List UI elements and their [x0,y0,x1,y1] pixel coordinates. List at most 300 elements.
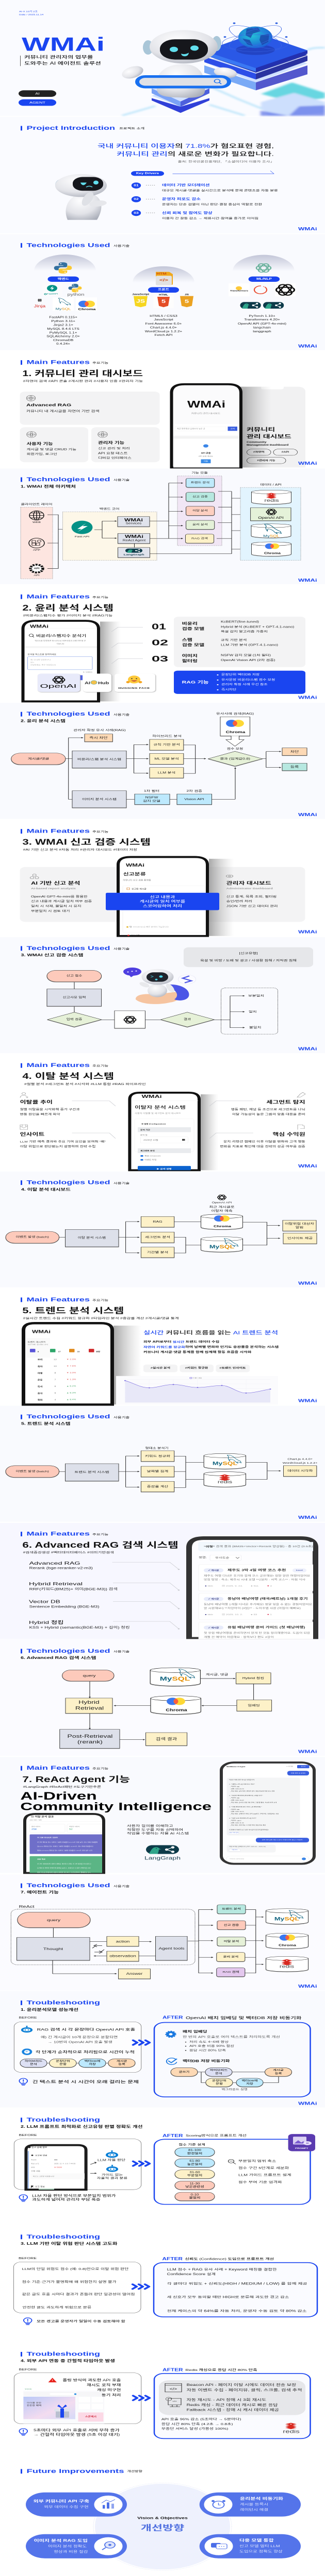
node: register [282,763,307,771]
connector: tools to modules [188,1910,213,1973]
tagline: 도와주는 AI 에이전트 솔루션 [24,61,101,66]
numbers: 03 [152,655,168,664]
node: MySQL: MySQL [213,1461,237,1466]
slide: hero cover [0,0,325,116]
problem note: 5초마다 외부 API 호출로 서버 부하 증가 [34,2428,120,2432]
panel: report types: 욕설 및 비방 / 도배 및 광고 / 사생활 침해 / 저작권 침해 [200,959,297,962]
panel: RAG function: 즉시차단 [221,688,236,691]
phone: analyzer: 석합니다 [56,642,65,645]
heading: Technologies Used [26,242,110,248]
phone: report screen [118,857,207,936]
panel: after: Redis 캐싱 - 최근 데이터 캐시로 빠른 응답 [187,2403,278,2406]
layer: feature modules: 신고 검증 [192,495,208,498]
panel: after: 글쓰기 [179,2070,190,2073]
heading: 사용기술 [113,1650,130,1653]
column: backend: MySQL [56,307,71,311]
phone: agent chat: 이탈 분석을 실행합니다 (기간: 2025-06 ~ 2025-10) [229,1846,266,1848]
phone: agent chat: ✦ 새 대화 [286,1766,294,1767]
column: frontend: </> [159,278,168,282]
node: image filters: Vision API [184,798,204,801]
panel: model details: LLM 기반 분석 (GPT-4.1-nano) [221,643,278,647]
back card: dashboard summary [240,387,305,467]
group: ReAct loop: query [47,1918,61,1922]
phone: churn result: 뷰(view) 행동을 하는 사용자 그룹의 이탈률이 14.6%로, 이는 전체 이탈률보다 [37,1845,93,1847]
node: trend system [59,1464,119,1481]
panel: report card: AI 기반 신고 분석 [31,880,80,886]
card: admin functions [91,427,160,462]
phone: agent chat: - 작성자: bbb [230,1808,240,1810]
panel: model details: 스팸 [182,637,192,642]
card: Advanced RAG: 커뮤니티 내 게시글을 자연어 기반 검색 [26,410,100,413]
pill: AGENT: AGENT [29,101,45,104]
panel: before: 문장단위 [56,2059,70,2062]
panel: RAG function: 유사문장 비윤리/스팸 점수 보정 [221,678,275,682]
panel: after [154,2263,317,2317]
subtitle: 3. LLM 기반 이탈 위험 판단 시스템 고도화 [21,2241,118,2246]
heading [21,594,109,600]
layer: feature modules: 기능 모듈 [191,471,208,474]
group: hybrid analyzers: 규칙 기반 분석 [153,743,180,747]
phone: agent chat [221,1762,314,1864]
node: instant block: 즉시 차단 [89,736,108,739]
driver 03: 03 [134,211,139,214]
phone: dashboard: API 콘솔 [201,452,211,454]
phone: dashboard: 검색 [231,428,235,430]
after label: Scoring방식으로 프롬프트 개선 [186,2133,247,2138]
slide: project introduction [0,117,325,233]
column: backend: 백엔드 [58,277,69,280]
phone: trend dashboard: 6 [55,1385,56,1387]
phone: search results: ● bbb [205,1614,213,1616]
connector: to analyzers [119,1222,139,1253]
heading: 사용기술 [113,244,130,248]
node: result diamond [208,751,262,766]
pill: async ethics analysis: 레이턴시 해결 [240,2508,268,2512]
column: frontend: WordCloud.js 1.2.2+ [145,330,182,333]
node: input validation: 입력 검증 [67,1018,82,1021]
callout: Vector DB: Sentence Embedding (BGE-M3) [29,1605,100,1608]
callout: key revenue [209,1125,305,1148]
panel: before: RAG 검색 시 각 문장마다 OpenAI API 호출 [37,2028,136,2031]
card: user functions: 회원가입, 로그인 [26,452,57,455]
node: block: 차단 [290,750,299,753]
headline: 실시간 커뮤니티 흐름을 읽는 AI 트렌드 분석 [143,1330,278,1335]
before label: BEFORE [19,2016,37,2020]
layer: feature modules [177,471,222,546]
heading: Main Features [26,1297,90,1303]
group: outcome branches: 부분일치 [248,994,264,997]
panel: before: 신고된 댓글 [35,2154,47,2156]
illustration: stacked blue platform [204,33,307,90]
numbers: 02 [152,638,168,647]
layer: data and API: 데이터 / API [260,483,282,486]
phone: search results: 정렬: [199,1555,207,1559]
column: ML/NLP: PyTorch 1.10+ [249,315,275,317]
driver 02: 운영자는 단순 검열이 아닌 판단·결정 중심의 역할로 전환 [162,202,263,206]
panel: report types: [신고유형] [239,952,258,955]
panel: before: 예) 긴 게시글이 10개 문장으로 분할되면 [41,2035,118,2039]
arrow: post data to chunking [201,1673,235,1679]
panel: before: 게시글 [117,2059,127,2062]
panel: after: 전체 케이스의 약 64%를 자동 처리, 운영자 수동 검토 약 80% 감소 [167,2309,307,2313]
node: post retrieval: Post-Retrieval [68,1734,112,1739]
layer: client: API [34,567,40,570]
panel: RAG function: 문장단위 벡터DB 저장 [221,673,259,676]
panel: before: ! [52,2380,53,2382]
phone: agent chat: - 주요 내용: 날씨 확인, 렌터카 필수, 맛집 정보와 여행 코스 포함 [230,1790,275,1792]
phone shadow [209,859,234,936]
heading: 주요기능 [92,1298,109,1302]
column: backend: FastAPI [47,293,58,295]
phone: analyzer: 안녕하세요, 좋은 아침입니다 [30,664,57,666]
node: segment analysis: 세그먼트 분석 [145,1235,170,1239]
phone: agent chat: 4. **일본 도쿄 자유여행 3박 4일 후기** [229,1818,257,1819]
layer: feature modules: 이탈 분석 [192,509,208,512]
panel: before: 각 단계가 순차적으로 처리됨으로 시간이 누적 [36,2050,135,2054]
node: MySQL: MySQL [209,1244,234,1249]
phone: search results: ♥ 1 [267,1614,272,1616]
driver 03 [132,210,258,220]
feature title: 5. 트렌드 분석 시스템 [22,1306,124,1315]
phone: trend dashboard: 8 [55,1372,56,1374]
node: segment analysis [141,1232,174,1243]
node: chroma with OpenAI note [201,1194,243,1230]
callout: Advanced RAG: Advanced RAG [29,1561,80,1566]
pill: multi model integration: 신고 모델 멀티 LLM [239,2544,280,2548]
panel: after: Confidence Score 설계 [167,2272,216,2276]
heading: 주요기능 [92,1533,109,1536]
illustration: robot with search bar [118,30,239,98]
pill: image analysis RAG [26,2534,127,2558]
panel: after [154,2374,311,2438]
subtitle: 6. Advanced RAG 검색 시스템 [21,1655,96,1660]
node: trend system: 트렌드 분석 시스템 [74,1470,109,1474]
panel: after: 부분일치 범위 축소 [238,2159,276,2163]
arrow: embedding to chroma [202,1705,237,1706]
center circle: 개선방향 [141,2524,185,2532]
phone: search results: ● 511 [251,1585,258,1587]
illustration: thinking robot [55,174,107,220]
phone: agent chat: 여행 관련 글 보여줘 [291,1772,305,1774]
panel: before: 2025. 11. 4. 오후 7:44:55 [54,2162,76,2164]
heading: Technologies Used [26,477,110,483]
node: ethics system: 비윤리/스팸 분석 시스템 [77,757,121,761]
node: data visualization [283,1458,318,1477]
connector: analyzers to result [184,745,206,773]
panel: before: 가이드 없는 [102,2173,123,2176]
phone shadow [113,1326,141,1404]
node: churn alert [283,1221,316,1231]
feature tags: #AI 기반 신고 분석 #자동 처리 #관리자 대시보드 #데이터 저장 [23,848,138,852]
callout: Hybrid chunking: Hybrid 청킹 [29,1620,64,1625]
phone shadow [100,622,121,701]
driver 01: 데이터 기반 모더레이션 [162,183,209,187]
driver 01: 대규모 게시글·댓글을 실시간으로 분석해 문제 콘텐츠를 자동 분류 [162,189,278,192]
phone: agent chat: - 작성자: admin [230,1820,241,1821]
problem note [19,2428,120,2436]
heading: 주요기능 [92,595,109,599]
pill: AI [19,90,56,97]
panel: before: 등록 [118,2062,125,2066]
panel: model details: 비윤리 [182,621,198,625]
layer: backend core: 백엔드 코어 [100,507,119,511]
panel: after: 분석 [215,2071,222,2075]
heading: 프로젝트 소개 [119,127,144,130]
column: ML/NLP: langchain [253,327,271,329]
pill: async ethics analysis: 윤리분석 비동기화 [240,2496,284,2500]
panel: after: </> [172,2400,177,2403]
node: answer [53,1960,150,1979]
big slogan: Community Intelligence [20,1801,212,1812]
column: frontend [132,266,194,337]
phone: agent chat: 이 중에서 자세히 보고 싶은 게시글이 있으면 알려주세요! [229,1829,269,1831]
back card: dashboard summary: #관리자 기능 [257,459,275,462]
pill: async ethics analysis [200,2493,301,2517]
heading: Technologies Used [26,1648,110,1654]
panel: before: 든든한 혜택 [27,2404,41,2407]
phone: trend dashboard: 17 [58,1351,60,1352]
panel: model details: KcBERT(fine-tuned) [221,621,259,623]
logo: WMAi [298,1750,317,1754]
before label: BEFORE [19,2257,37,2260]
phone: trend dashboard: ▼ 2.0% [67,1359,76,1360]
panel: after: </> [170,2387,177,2391]
arrow: before to after [133,2040,150,2045]
arrow: to result [120,1739,145,1740]
description: 커뮤니티 게시글·댓글 통계를 함께 집계해 활동 흐름을 시각화 [143,1350,252,1353]
card: admin functions: API 요청 테스트 [98,452,128,455]
logo: WMAi [298,1281,317,1286]
column: backend [34,255,97,346]
phone: search results: ♥ 3 [267,1585,272,1587]
panel: before [14,2373,141,2424]
heading: Main Features [26,1531,90,1537]
panel: after: 응답 시간 80% 단축 [189,2048,226,2052]
subtitle: 4. 이탈 분석 대시보드 [21,1187,71,1191]
phone: trend dashboard: 9 [38,1351,39,1352]
phone: search results: ● 53 [251,1614,257,1616]
pill: image analysis RAG: 향상과 비용 절감 [54,2550,88,2553]
phone: analyzer: 또는 [30,662,35,663]
panel: after: 한 번의 API 호출로 여러 텍스트를 처리하도록 개선 [183,2035,280,2039]
callout: churn trend [20,1093,116,1116]
feature tags: #자연어 검색 #API 콘솔 #게시판 관리 #사용자 인증 #관리자 기능 [23,379,143,383]
node: MySQL: MySQL [274,1916,299,1921]
heading: Main Features [26,828,90,835]
before label: BEFORE [19,2368,37,2371]
panel: model details: 필터링 [182,658,198,663]
node: ethics system [72,751,126,768]
phone: search results: 제주도 여행 다녀온 후기와 함께 코스 공유해요! 정말 알찬 여행이었어요 [204,1574,311,1577]
pill: multi model integration [200,2534,301,2558]
phone: churn result: 52 [69,1828,73,1831]
node: search result: 검색 결과 [156,1737,177,1741]
phone: search results: ✓ 게시글 [208,1569,219,1572]
node: churn alert: 이탈위험 대상자 [285,1222,315,1225]
node: RAG: RAG [153,1221,163,1224]
problem note: 과도하게 넓어져 관리자 부담 폭증 [32,2198,101,2201]
back card: dashboard summary: 관리 대시보드 [247,434,291,439]
feature tags: #LangGraph #ReAct패턴 #도구기반추론 [23,1785,102,1788]
phone: trend dashboard: 12 [54,1359,57,1361]
panel: before: 벡터DB에 [84,2059,101,2062]
center circle: Vision & Objectives [137,2516,188,2520]
phone: dashboard: 최근 일주일간 조회수가 높은 글 [177,428,206,430]
node: keyword normalization: 형태소 분석기 [145,1446,169,1450]
description: 사용자 질의를 이해하고 [127,1824,173,1827]
phone: agent chat: - 작성자: bbb [230,1797,240,1799]
card: Hugging Face: HUGGING FACE [118,687,150,690]
slide: trend flowchart [0,1406,325,1522]
panel: model details: 이미지 [182,654,198,657]
logo: WMAi [298,930,317,935]
phone: report screen: 신고분류 [123,872,146,877]
heading: 주요기능 [92,1767,109,1770]
column: ML/NLP: ML/NLP [256,278,272,280]
node: input validation [47,1012,102,1027]
card: admin functions: 신고 관리 및 처리 [98,447,130,450]
phone: report screen: 팁: Ctrl+Enter로 빠른 분석이 가능합니다. [129,926,169,928]
logo: WMAi [298,461,317,466]
phone: search results: travel [296,1569,303,1571]
panel: after: 31-60 [189,2171,200,2174]
node: image filters: 2차 검증 [186,789,202,792]
column: ML/NLP: langgraph [253,330,271,333]
subtitle: 7. 에이전트 기능 [21,1890,59,1894]
problem note: 긴 텍스트 분석 시 시간이 오래 걸리는 문제 [32,2079,139,2083]
connector: analyzers to stores [174,1456,204,1487]
node: trend analysis: 트렌드 분석 [222,1907,241,1910]
card: user functions: 게시글 및 댓글 CRUD 기능 [26,448,76,451]
node: growth rate: 증감률 계산 [147,1485,169,1488]
feature title: 4. 이탈 분석 시스템 [22,1072,114,1081]
node: image filters [126,768,235,804]
icon: AI prompt badge: AI [306,2142,309,2144]
callout: key revenue: 변화를 지표로 확인해 대응 전략의 성공 여부를 검증 [220,1145,305,1148]
panel: after: 자동 이벤트 수집 - 페이지뷰, 클릭, 스크롤, 검색 추적 [187,2388,302,2392]
callout: insight [20,1124,116,1148]
node: report validation: 신고 검증 [224,1923,239,1926]
phone: churn result: 권장 액션 [37,1858,45,1860]
node: image filters: 감지 모델 [143,799,160,803]
phone: trend dashboard: 10 [77,1351,79,1352]
phone: search results: 제주도 3박 4일 여행 코스 추천 [228,1568,286,1572]
panel: after: redis [283,2429,300,2434]
phone: churn screen: WMAi [141,1094,161,1099]
band: scoring callout: 스코어링하여 처리 [143,904,182,908]
panel: report card: 일치 시 삭제, 불일치 시 유지 [31,904,82,908]
callout: insight: LLM 기반 예측 결과와 주요 기여 요인을 보여줘 “왜” [20,1140,106,1143]
heading: Technologies Used [26,1414,110,1420]
numbers: 01 [152,623,166,631]
subtitle: 1. 윤리분석모델 성능개선 [21,2007,78,2011]
callout: insight: 인사이트 [20,1132,44,1137]
heading: 주요기능 [92,1064,109,1067]
description: 적절한 도구를 자동 선택하여 [127,1827,183,1832]
phone: search results: “여행” 검색 결과 (BM25+Vector+Rerank 앙상블) - 총 10건 (0.5초) [204,1545,313,1548]
pill: AI: AI [35,92,40,95]
phone: search results: 맛집 탐방 - 숙소: 제주시 시내 호텔 **2일차 - 서쪽 코스** - 아침 식사 [204,1578,306,1581]
heading: Troubleshooting [26,2351,100,2358]
driver 03: 이용자 간 갈등 감소 → 체류시간·참여율 증가로 이어짐 [162,216,258,220]
panel: before: 점수 기준·근거가 불명확해 왜 위험한지 설명 불가 [22,2280,117,2284]
panel: before: 분석 [30,2062,37,2066]
panel: before [14,2139,141,2190]
heading: Troubleshooting [26,2234,100,2240]
node: Chroma: Chroma [279,1943,297,1947]
phone: search results [189,1538,322,1645]
node: churn alert: 알림 [296,1226,303,1229]
slide: technologies used overview [0,234,325,350]
panel: RAG function [174,671,305,694]
layer: backend core: Fast API [75,535,89,538]
phone: churn result: 기간: N/A ~ N/A [29,1819,42,1821]
back card: dashboard summary: Community [247,441,267,444]
phone: trend dashboard: 주요 트렌드 및 키워드 분석 [27,1344,48,1345]
phone: search results: ▦ 2025. 10. 2. [222,1613,243,1616]
phone: report screen: WMAi [126,863,144,868]
phone: trend dashboard: 취미 [38,1399,42,1401]
connector: analyzers to stores [174,1222,201,1253]
meta text: Date / 2025.11.14 [19,13,43,16]
panel: after: 부분일치 [187,2174,202,2177]
phone: agent chat: - 주요 내용: 습식과 교통 이용 안내, 그랩 앱 활용, 숙소와 비자 소개 [230,1802,277,1803]
driver 01: 01 [134,184,139,187]
node: hybrid retrieval: Hybrid [78,1700,100,1705]
phone: agent chat: - 날짜: 2025-10-02 [230,1800,244,1801]
heading: Troubleshooting [26,1999,100,2006]
callout: Hybrid Retrieval [29,1582,180,1591]
layer: backend core: WMAi [125,534,143,539]
connector: to analyzers [119,1456,139,1487]
phone: agent chat: 무엇이든 물어보세요 [230,1858,245,1860]
column: frontend: JavaScript [132,293,149,296]
heading: 주요기능 [92,830,109,834]
node: query: query [83,1674,96,1677]
panel: before: 저장 [89,2062,96,2066]
slide: troubleshooting 2 [14,2117,315,2205]
slide: troubleshooting 4 [14,2351,311,2438]
node: churn analysis: 이탈 분석 [224,1939,239,1943]
phone: agent chat: - 날짜: 2025-10-15 [230,1811,244,1812]
heading: Main Features [26,594,90,600]
driver 02: 운영자 피로도 감소 [162,197,201,201]
panel: after: 게시글 [273,2068,284,2072]
panel: report card: JSON 기반 신고 데이터 관리 [226,904,278,908]
panel: after: 11-30 [190,2182,200,2185]
panel: after: LLM 가이드 프롬프트 설계 [238,2173,291,2177]
slide: troubleshooting 1 [0,1991,325,2108]
heading: Main Features [26,1062,90,1069]
slide: main feature 5 trend [21,1297,317,1404]
problem note [19,2194,116,2202]
node: MySQL [204,1453,246,1469]
node: chroma with OpenAI note: Chroma [214,1225,232,1228]
card: user functions [20,427,88,462]
logo: WMAi [298,812,317,817]
logo: WMAi [298,344,317,349]
description: 자연어 키워드를 정규화하여 날짜별 변화와 인기도 증감률을 분석하는 시스템 [143,1345,279,1349]
heading: 개선방향 [127,2469,142,2473]
node: keyword normalization [141,1446,174,1462]
meta text [19,10,43,16]
phone: agent chat: 3. **유럽 배낭여행 준비 가이드 (첫 배낭여행)** [229,1806,263,1808]
layer: client: 클라이언트 레이어 [21,502,52,506]
before label: BEFORE [19,2133,37,2137]
column: frontend: HTM [156,272,167,275]
node: redis [266,1956,308,1972]
phone: churn result: 로그인 행동을 하는 사용자 그룹의 이탈률이 22.0%로 가장 높아, 이는 전체 이탈률의 [37,1841,98,1843]
